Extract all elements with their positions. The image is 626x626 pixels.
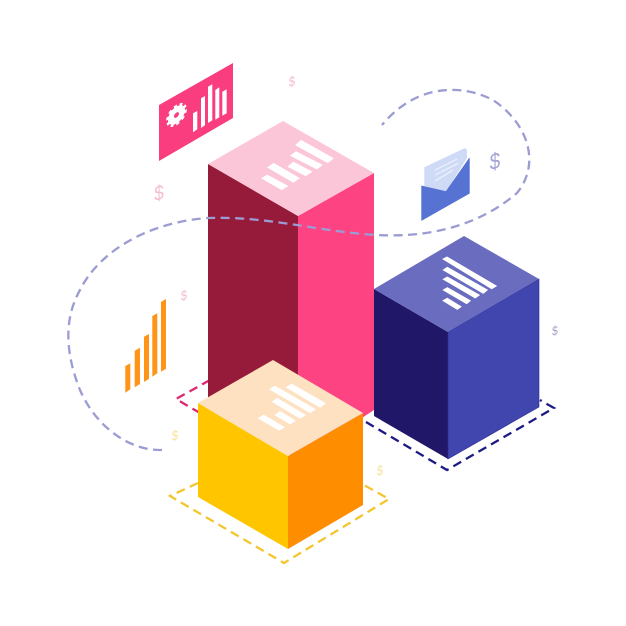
pink base dashed outline: [176, 380, 210, 413]
dollar sign: $: [377, 462, 383, 479]
pink column top icon: [262, 140, 333, 190]
card bars: [193, 84, 227, 132]
icon: gear: [167, 100, 186, 130]
dollar sign: $: [154, 180, 164, 207]
blue base dashed outline: [366, 400, 554, 470]
pink bar column: [208, 121, 374, 460]
dollar sign: $: [181, 287, 187, 304]
icon: orange mini bar chart: [125, 299, 166, 393]
yellow column top icon: [258, 384, 325, 430]
dollar sign: $: [172, 427, 178, 444]
yellow base dashed outline: [170, 483, 389, 563]
blue bar column: [374, 236, 539, 459]
dollar sign: $: [289, 73, 295, 90]
dollar sign: $: [552, 323, 558, 339]
yellow bar column: [198, 360, 363, 549]
dollar sign: $: [490, 147, 500, 176]
floating pink chart card: [159, 63, 233, 161]
blue column top icon: [443, 257, 496, 309]
dashed connector curve: [68, 90, 529, 450]
icon: envelope: [422, 148, 469, 220]
